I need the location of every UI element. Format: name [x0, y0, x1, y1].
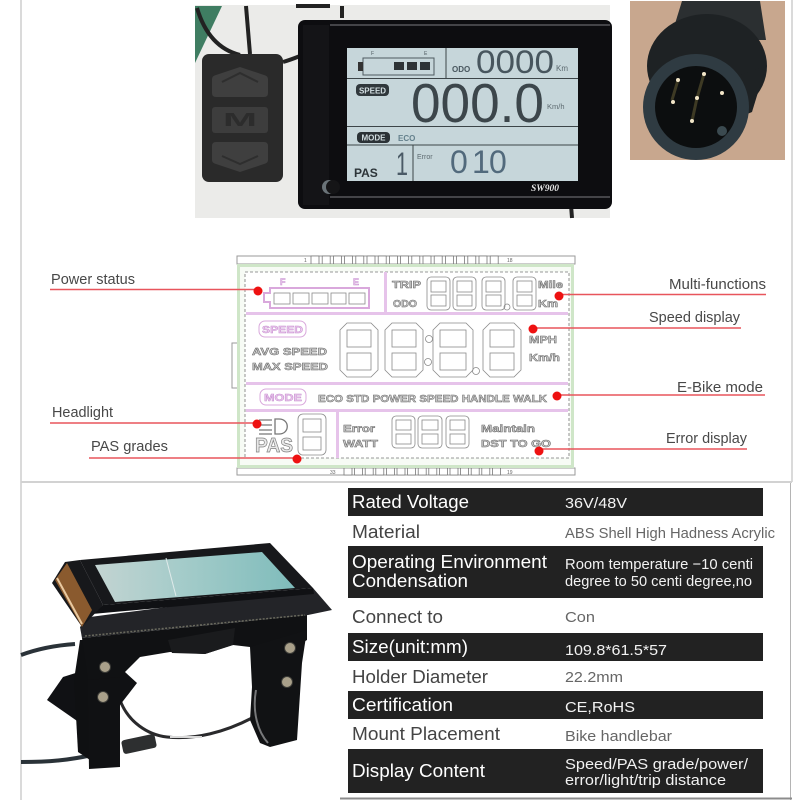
row: Size: Size(unit:mm)	[352, 636, 468, 657]
callout: Multi-functions	[554, 277, 766, 300]
speed segment: Km/h	[529, 352, 560, 364]
row: Material: ABS Shell High Hadness Acrylic	[565, 525, 775, 542]
panel: display body	[298, 20, 612, 209]
frame and pins: 18	[507, 258, 513, 264]
device screen	[95, 552, 295, 602]
callout: Headlight: Headlight	[52, 405, 113, 421]
error segment: Error	[343, 424, 375, 435]
speed segment: SPEED	[262, 324, 303, 336]
icon: mode button: M	[223, 110, 257, 130]
frame and pins: 1	[304, 258, 307, 264]
mount screws	[98, 642, 296, 702]
row: Rated Voltage: Rated Voltage	[352, 491, 469, 512]
error reading: Error	[417, 154, 433, 161]
callout: E-Bike mode: E-Bike mode	[677, 380, 763, 396]
multi-function segment: Km	[538, 299, 558, 310]
photo: connector plug	[630, 1, 785, 160]
error reading	[417, 144, 507, 180]
PAS reading	[354, 146, 408, 182]
row: Connect to: Con	[565, 609, 595, 626]
callout: Power status	[50, 272, 262, 296]
callout: PAS grades	[89, 439, 302, 464]
model name: SW900	[531, 184, 559, 194]
odometer reading: 0000	[476, 44, 554, 80]
row: Size	[348, 633, 763, 661]
speed reading	[356, 72, 565, 134]
row: Operating Environment: degree to 50 centi degree,no	[565, 573, 752, 590]
row: Mount Placement: Mount Placement	[352, 723, 500, 744]
row: Rated Voltage: 36V/48V	[565, 495, 627, 512]
specification table	[348, 488, 775, 793]
device top plate	[80, 543, 313, 605]
row: Material	[352, 521, 775, 542]
PAS reading: PAS	[354, 166, 378, 180]
speed segment: MAX SPEED	[252, 361, 328, 373]
callout: Speed display	[528, 310, 741, 334]
mode row	[357, 132, 415, 143]
icon: battery: E	[424, 51, 428, 57]
row: Size: 109.8*61.5*57	[565, 642, 667, 659]
error segment: DST TO GO	[481, 439, 551, 450]
speed segment: AVG SPEED	[252, 346, 328, 358]
frame and pins	[232, 256, 575, 476]
row: Connect to: Connect to	[352, 606, 443, 627]
multi-function segment: TRIP	[392, 280, 421, 291]
frame and pins: 33	[330, 470, 336, 476]
row: Display Content	[348, 749, 763, 793]
callout: E-Bike mode	[552, 380, 765, 400]
headlight and PAS segment: PAS	[255, 435, 293, 457]
callout: Multi-functions: Multi-functions	[669, 277, 766, 293]
mode segment: ECO STD POWER SPEED HANDLE WALK	[318, 393, 547, 405]
LCD segment diagram	[232, 256, 575, 476]
mode segment: MODE	[264, 392, 302, 404]
frame and pins: 19	[507, 470, 513, 476]
device side reflection	[52, 560, 103, 627]
row: Operating Environment	[348, 546, 763, 598]
row: Display Content: error/light/trip distance	[565, 772, 726, 789]
row: Holder Diameter	[352, 666, 623, 687]
row: Holder Diameter: Holder Diameter	[352, 666, 488, 687]
callout: Speed display: Speed display	[649, 310, 741, 326]
odometer reading	[452, 44, 568, 80]
speed reading: SPEED	[359, 86, 386, 96]
speed reading: 000.0	[411, 72, 544, 134]
odometer reading: ODO	[452, 65, 470, 74]
speed segment: MPH	[529, 334, 557, 346]
battery segment: E	[353, 277, 359, 287]
row: Operating Environment: Room temperature −10 centi	[565, 556, 753, 573]
battery segment	[264, 277, 369, 308]
multi-function segment	[392, 277, 564, 310]
mode segment	[260, 389, 547, 405]
PAS reading: 1	[396, 146, 408, 182]
icon: up button	[212, 67, 268, 97]
error segment: Maintain	[481, 424, 535, 435]
row: Certification	[348, 691, 763, 719]
row: Certification: Certification	[352, 694, 453, 715]
odometer reading: Km	[556, 64, 568, 73]
multi-function segment: ODO	[393, 299, 417, 310]
row: Rated Voltage	[348, 488, 763, 516]
icon: battery: F	[371, 51, 374, 57]
row: Display Content: Speed/PAS grade/power/	[565, 756, 749, 773]
error segment: WATT	[343, 439, 378, 450]
panel: LCD screen	[347, 44, 578, 182]
row: Holder Diameter: 22.2mm	[565, 669, 623, 686]
row: Material: Material	[352, 521, 420, 542]
device bevel edge	[80, 588, 332, 638]
row: Mount Placement: Bike handlebar	[565, 728, 672, 745]
callout: PAS grades: PAS grades	[91, 439, 168, 455]
panel: button pod	[202, 54, 283, 182]
callout: Error display	[534, 431, 748, 456]
speed reading: Km/h	[547, 102, 565, 111]
row: Certification: CE,RoHS	[565, 699, 635, 716]
icon: down button	[212, 142, 268, 172]
mode row: ECO	[398, 134, 415, 143]
row: Operating Environment: Condensation	[352, 570, 468, 591]
icon: battery	[358, 51, 434, 75]
mode row: MODE	[362, 134, 386, 143]
callout: Headlight	[50, 405, 262, 428]
row: Operating Environment: Operating Environment	[352, 551, 547, 572]
error reading: 010	[450, 144, 507, 180]
photo: SW900 display and button pod	[195, 5, 612, 218]
headlight and PAS segment	[255, 414, 326, 457]
callout: Power status: Power status	[51, 272, 135, 288]
photo: display on handlebar mount	[21, 543, 332, 769]
speed segment	[252, 321, 560, 377]
multi-function segment: Mile	[538, 280, 564, 291]
error segment	[343, 416, 551, 450]
row: Mount Placement	[352, 723, 672, 745]
battery segment: F	[280, 277, 286, 287]
row: Connect to	[352, 606, 595, 627]
row: Display Content: Display Content	[352, 760, 485, 781]
callout: Error display: Error display	[666, 431, 748, 447]
